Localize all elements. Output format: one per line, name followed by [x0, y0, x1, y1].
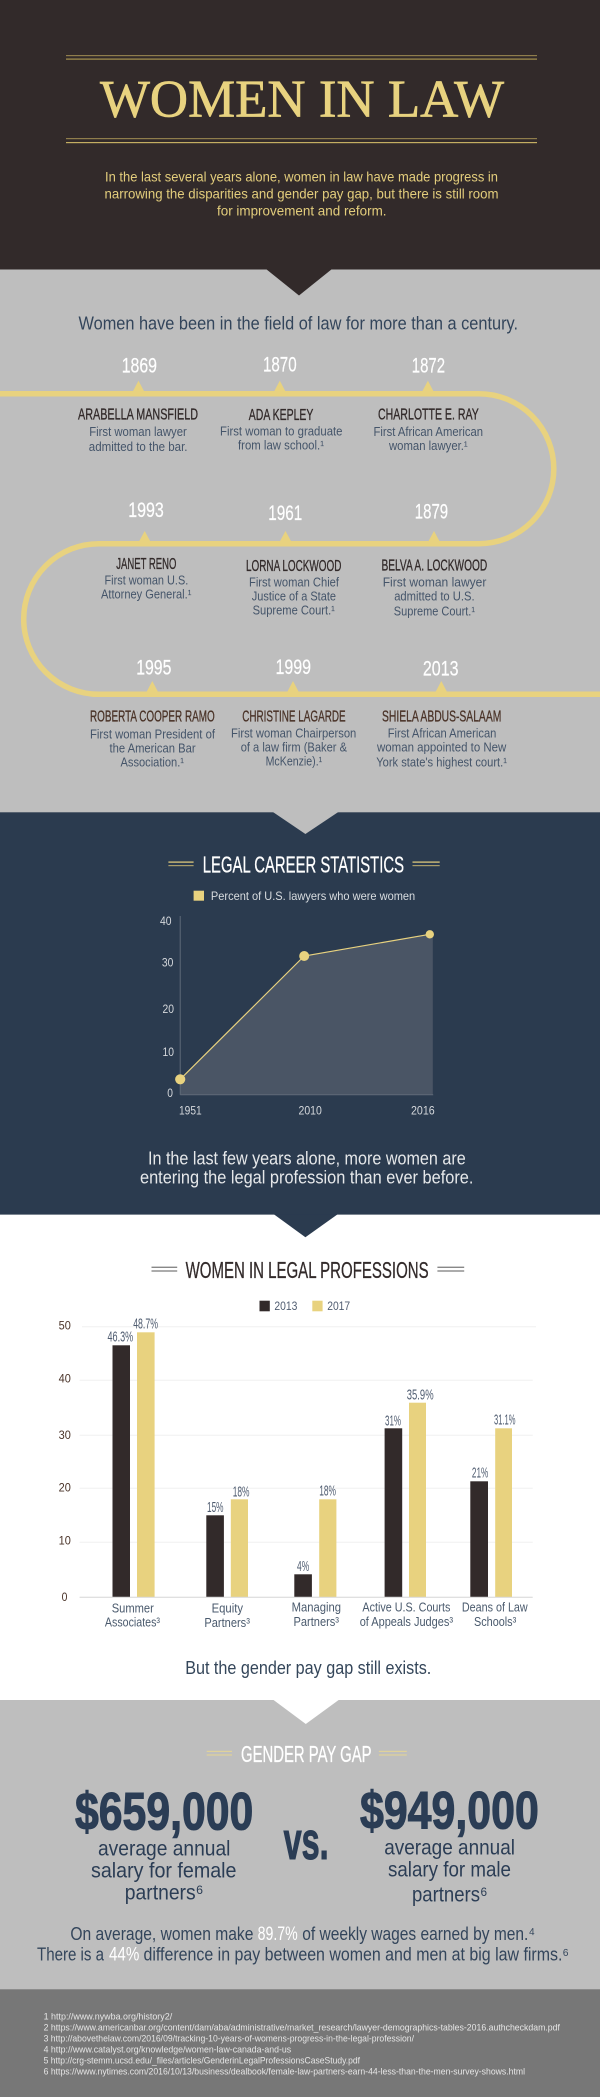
- event: 1872: woman lawyer.¹: [388, 439, 468, 453]
- stat: female salary: $659,000: [75, 1782, 253, 1842]
- wage statistic line 1: of weekly wages earned by men.⁴: [302, 1924, 535, 1944]
- event: 1879: Supreme Court.¹: [394, 605, 475, 619]
- panel: header: [0, 0, 600, 270]
- bar chart: 10: [59, 1534, 71, 1548]
- event: 1870: 1870: [263, 354, 297, 377]
- heading rules left: [152, 1267, 177, 1272]
- event: 1961: LORNA LOCKWOOD: [246, 558, 341, 575]
- versus label: vs.: [284, 1812, 329, 1871]
- stat: female salary: [75, 1782, 253, 1904]
- event: 1961: Justice of a State: [252, 589, 336, 603]
- group: active U.S. courts of appeals judges: [360, 1387, 454, 1629]
- intro text: [104, 169, 498, 218]
- chart legend: Percent of U.S. lawyers who were women: [211, 889, 415, 903]
- area line chart: 2010: [298, 1104, 322, 1118]
- group: deans of law schools: [462, 1413, 528, 1629]
- event: 1869: 1869: [122, 354, 157, 378]
- group: summer associates: Associates³: [105, 1615, 161, 1630]
- event: 1993: [101, 499, 191, 601]
- event: 1993: JANET RENO: [116, 556, 176, 573]
- bar chart legend: 2013: [274, 1299, 298, 1313]
- statistics caption: entering the legal profession than ever before.: [140, 1167, 473, 1187]
- event: 1961: Supreme Court.¹: [253, 603, 335, 617]
- panel: footnotes: 6 https://www.nytimes.com/2016/10/13/business/dealbook/female-law-partners-earn-44-less-than-the-men-survey-shows.html: [44, 2066, 525, 2077]
- event: 2013: woman appointed to New: [376, 740, 507, 754]
- heading: legal career statistics: LEGAL CAREER STATISTICS: [203, 851, 404, 877]
- wage statistic line 1: 89.7%: [258, 1924, 298, 1945]
- bar chart legend: [260, 1299, 350, 1313]
- heading rules right: [437, 1267, 464, 1272]
- group: managing partners: Partners³: [294, 1614, 340, 1629]
- event: 1869: [78, 354, 198, 454]
- area line chart: 40: [160, 914, 172, 928]
- intro text: In the last several years alone, women in law have made progress in: [105, 169, 498, 185]
- timeline markers: [132, 381, 448, 693]
- group: active U.S. courts of appeals judges: of Appeals Judges³: [360, 1614, 454, 1629]
- event: 1870: [220, 354, 343, 453]
- group: equity partners: 18%: [233, 1484, 250, 1500]
- stat: female salary: average annual: [98, 1838, 230, 1861]
- area line chart: [160, 914, 435, 1118]
- area line chart: 20: [162, 1002, 174, 1016]
- bar chart: 50: [59, 1318, 71, 1332]
- area line chart: 2016: [411, 1104, 435, 1118]
- event: 1870: First woman to graduate: [220, 425, 343, 439]
- intro text: narrowing the disparities and gender pay gap, but there is still room: [104, 186, 498, 202]
- stat: male salary: salary for male: [388, 1859, 511, 1882]
- event: 1999: First woman Chairperson: [231, 726, 356, 740]
- wage statistic line 2: There is a: [37, 1945, 105, 1965]
- event: 1869: admitted to the bar.: [89, 440, 188, 454]
- panel: gender pay gap: [0, 1700, 600, 1989]
- area line chart: 1951: [179, 1104, 202, 1118]
- event: 1999: [231, 656, 356, 768]
- group: deans of law schools: 31.1%: [494, 1413, 516, 1429]
- group: managing partners: 4%: [297, 1559, 309, 1575]
- group: managing partners: Managing: [292, 1600, 341, 1615]
- header pointer arrow: [266, 269, 332, 296]
- event: 1870: from law school.¹: [238, 439, 324, 453]
- wage statistic line 1: On average, women make: [70, 1924, 253, 1944]
- group: managing partners: [292, 1483, 341, 1629]
- bar chart legend: 2017: [327, 1299, 350, 1313]
- stat: male salary: average annual: [384, 1837, 515, 1860]
- event: 1999: CHRISTINE LAGARDE: [242, 708, 346, 725]
- event: 1993: 1993: [128, 499, 164, 522]
- panel: footnotes: [0, 1989, 600, 2097]
- stat: male salary: partners⁶: [412, 1884, 488, 1907]
- panel: legal career statistics: [0, 812, 600, 1215]
- event: 1995: Association.¹: [120, 755, 184, 769]
- group: deans of law schools: 21%: [472, 1465, 488, 1481]
- heading rules right: [412, 862, 440, 866]
- heading: gender pay gap: GENDER PAY GAP: [241, 1741, 372, 1767]
- panel: footnotes: 4 http://www.catalyst.org/knowledge/women-law-canada-and-us: [44, 2044, 291, 2055]
- professions caption: But the gender pay gap still exists.: [185, 1657, 431, 1678]
- heading rules right: [379, 1751, 407, 1756]
- panel: women in legal professions: [0, 1214, 600, 1700]
- section pointer arrow: [274, 1214, 338, 1237]
- statistics caption: [140, 1148, 473, 1187]
- event: 1961: First woman Chief: [249, 575, 339, 589]
- group: active U.S. courts of appeals judges: Active U.S. Courts: [362, 1600, 451, 1615]
- section pointer arrow: [273, 812, 338, 834]
- panel: timeline section: [0, 269, 600, 812]
- event: 1872: CHARLOTTE E. RAY: [378, 406, 479, 423]
- event: 1999: 1999: [276, 656, 311, 679]
- area line chart: 10: [162, 1045, 174, 1059]
- event: 1995: [90, 656, 215, 769]
- event: 1879: [382, 501, 487, 619]
- event: 2013: 2013: [423, 658, 458, 681]
- event: 1879: First woman lawyer: [383, 576, 486, 590]
- intro text: for improvement and reform.: [217, 202, 386, 218]
- event: 1869: ARABELLA MANSFIELD: [78, 406, 198, 423]
- event: 1872: First African American: [374, 425, 483, 439]
- event: 1995: First woman President of: [90, 727, 215, 741]
- wage statistic line 1: [70, 1924, 535, 1945]
- group: summer associates: 48.7%: [133, 1316, 158, 1332]
- area line chart: 0: [167, 1086, 173, 1100]
- group: deans of law schools: Schools³: [474, 1614, 517, 1629]
- timeline intro heading: Women have been in the field of law for more than a century.: [78, 313, 518, 333]
- event: 1993: Attorney General.¹: [101, 587, 191, 601]
- event: 1879: admitted to U.S.: [394, 590, 475, 604]
- panel: footnotes: 1 http://www.nywba.org/history2/: [44, 2011, 173, 2022]
- group: equity partners: [204, 1484, 250, 1630]
- event: 1995: ROBERTA COOPER RAMO: [90, 708, 215, 725]
- bar chart: 0: [62, 1590, 68, 1604]
- heading rules left: [168, 862, 194, 866]
- group: summer associates: [105, 1316, 161, 1630]
- bar chart: 20: [59, 1481, 71, 1495]
- group: equity partners: 15%: [207, 1500, 224, 1516]
- event: 1872: 1872: [412, 354, 445, 378]
- panel: footnotes: 3 http://abovethelaw.com/2016/09/tracking-10-years-of-womens-progress-in-the-legal-profession/: [44, 2033, 414, 2044]
- event: 1961: [246, 502, 341, 617]
- event: 1999: of a law firm (Baker &: [241, 740, 348, 754]
- stat: male salary: $949,000: [360, 1781, 539, 1840]
- wage statistic line 2: 44%: [109, 1945, 139, 1966]
- stat: female salary: partners⁶: [125, 1881, 204, 1904]
- event: 1869: First woman lawyer: [89, 425, 187, 439]
- group: deans of law schools: Deans of Law: [462, 1600, 528, 1615]
- event: 1993: First woman U.S.: [104, 573, 188, 587]
- section pointer arrow: [273, 1700, 339, 1724]
- event: 1879: BELVA A. LOCKWOOD: [382, 557, 487, 574]
- area line chart: 30: [162, 956, 174, 970]
- bar chart: 40: [59, 1371, 71, 1385]
- panel: footnotes: 2 https://www.americanbar.org/content/dam/aba/administrative/market_research/lawyer-demographics-tables-2016.authcheckdam.pdf: [44, 2022, 560, 2033]
- event: 2013: First African American: [388, 726, 496, 740]
- event: 1995: 1995: [136, 656, 171, 679]
- stat: male salary: [360, 1781, 539, 1907]
- event: 1872: [374, 354, 483, 453]
- group: summer associates: Summer: [112, 1600, 154, 1615]
- bar chart: 30: [59, 1428, 71, 1442]
- panel: footnotes: 5 http://crg-stemm.ucsd.edu/_files/articles/GenderinLegalProfessionsCaseStudy.pdf: [44, 2055, 360, 2066]
- event: 2013: York state's highest court.¹: [376, 755, 507, 769]
- group: equity partners: Partners³: [204, 1615, 250, 1630]
- stat: female salary: salary for female: [91, 1859, 236, 1882]
- heading: women in legal professions: WOMEN IN LEGAL PROFESSIONS: [186, 1257, 429, 1283]
- group: summer associates: 46.3%: [108, 1329, 133, 1345]
- event: 1995: the American Bar: [110, 741, 196, 755]
- event: 1999: McKenzie).¹: [266, 754, 322, 768]
- event: 1961: 1961: [268, 502, 302, 525]
- bar chart: [59, 1316, 536, 1630]
- event: 1870: ADA KEPLEY: [249, 407, 313, 424]
- group: managing partners: 18%: [319, 1483, 336, 1499]
- timeline path: [0, 394, 600, 694]
- group: active U.S. courts of appeals judges: 31%: [385, 1413, 401, 1429]
- group: active U.S. courts of appeals judges: 35.9%: [407, 1387, 434, 1403]
- event: 1879: 1879: [415, 501, 448, 524]
- title: WOMEN IN LAW: [100, 70, 504, 128]
- heading rules left: [207, 1751, 232, 1756]
- group: equity partners: Equity: [212, 1601, 243, 1616]
- event: 2013: [376, 658, 507, 769]
- statistics caption: In the last few years alone, more women are: [148, 1148, 466, 1168]
- event: 2013: SHIELA ABDUS-SALAAM: [382, 708, 501, 725]
